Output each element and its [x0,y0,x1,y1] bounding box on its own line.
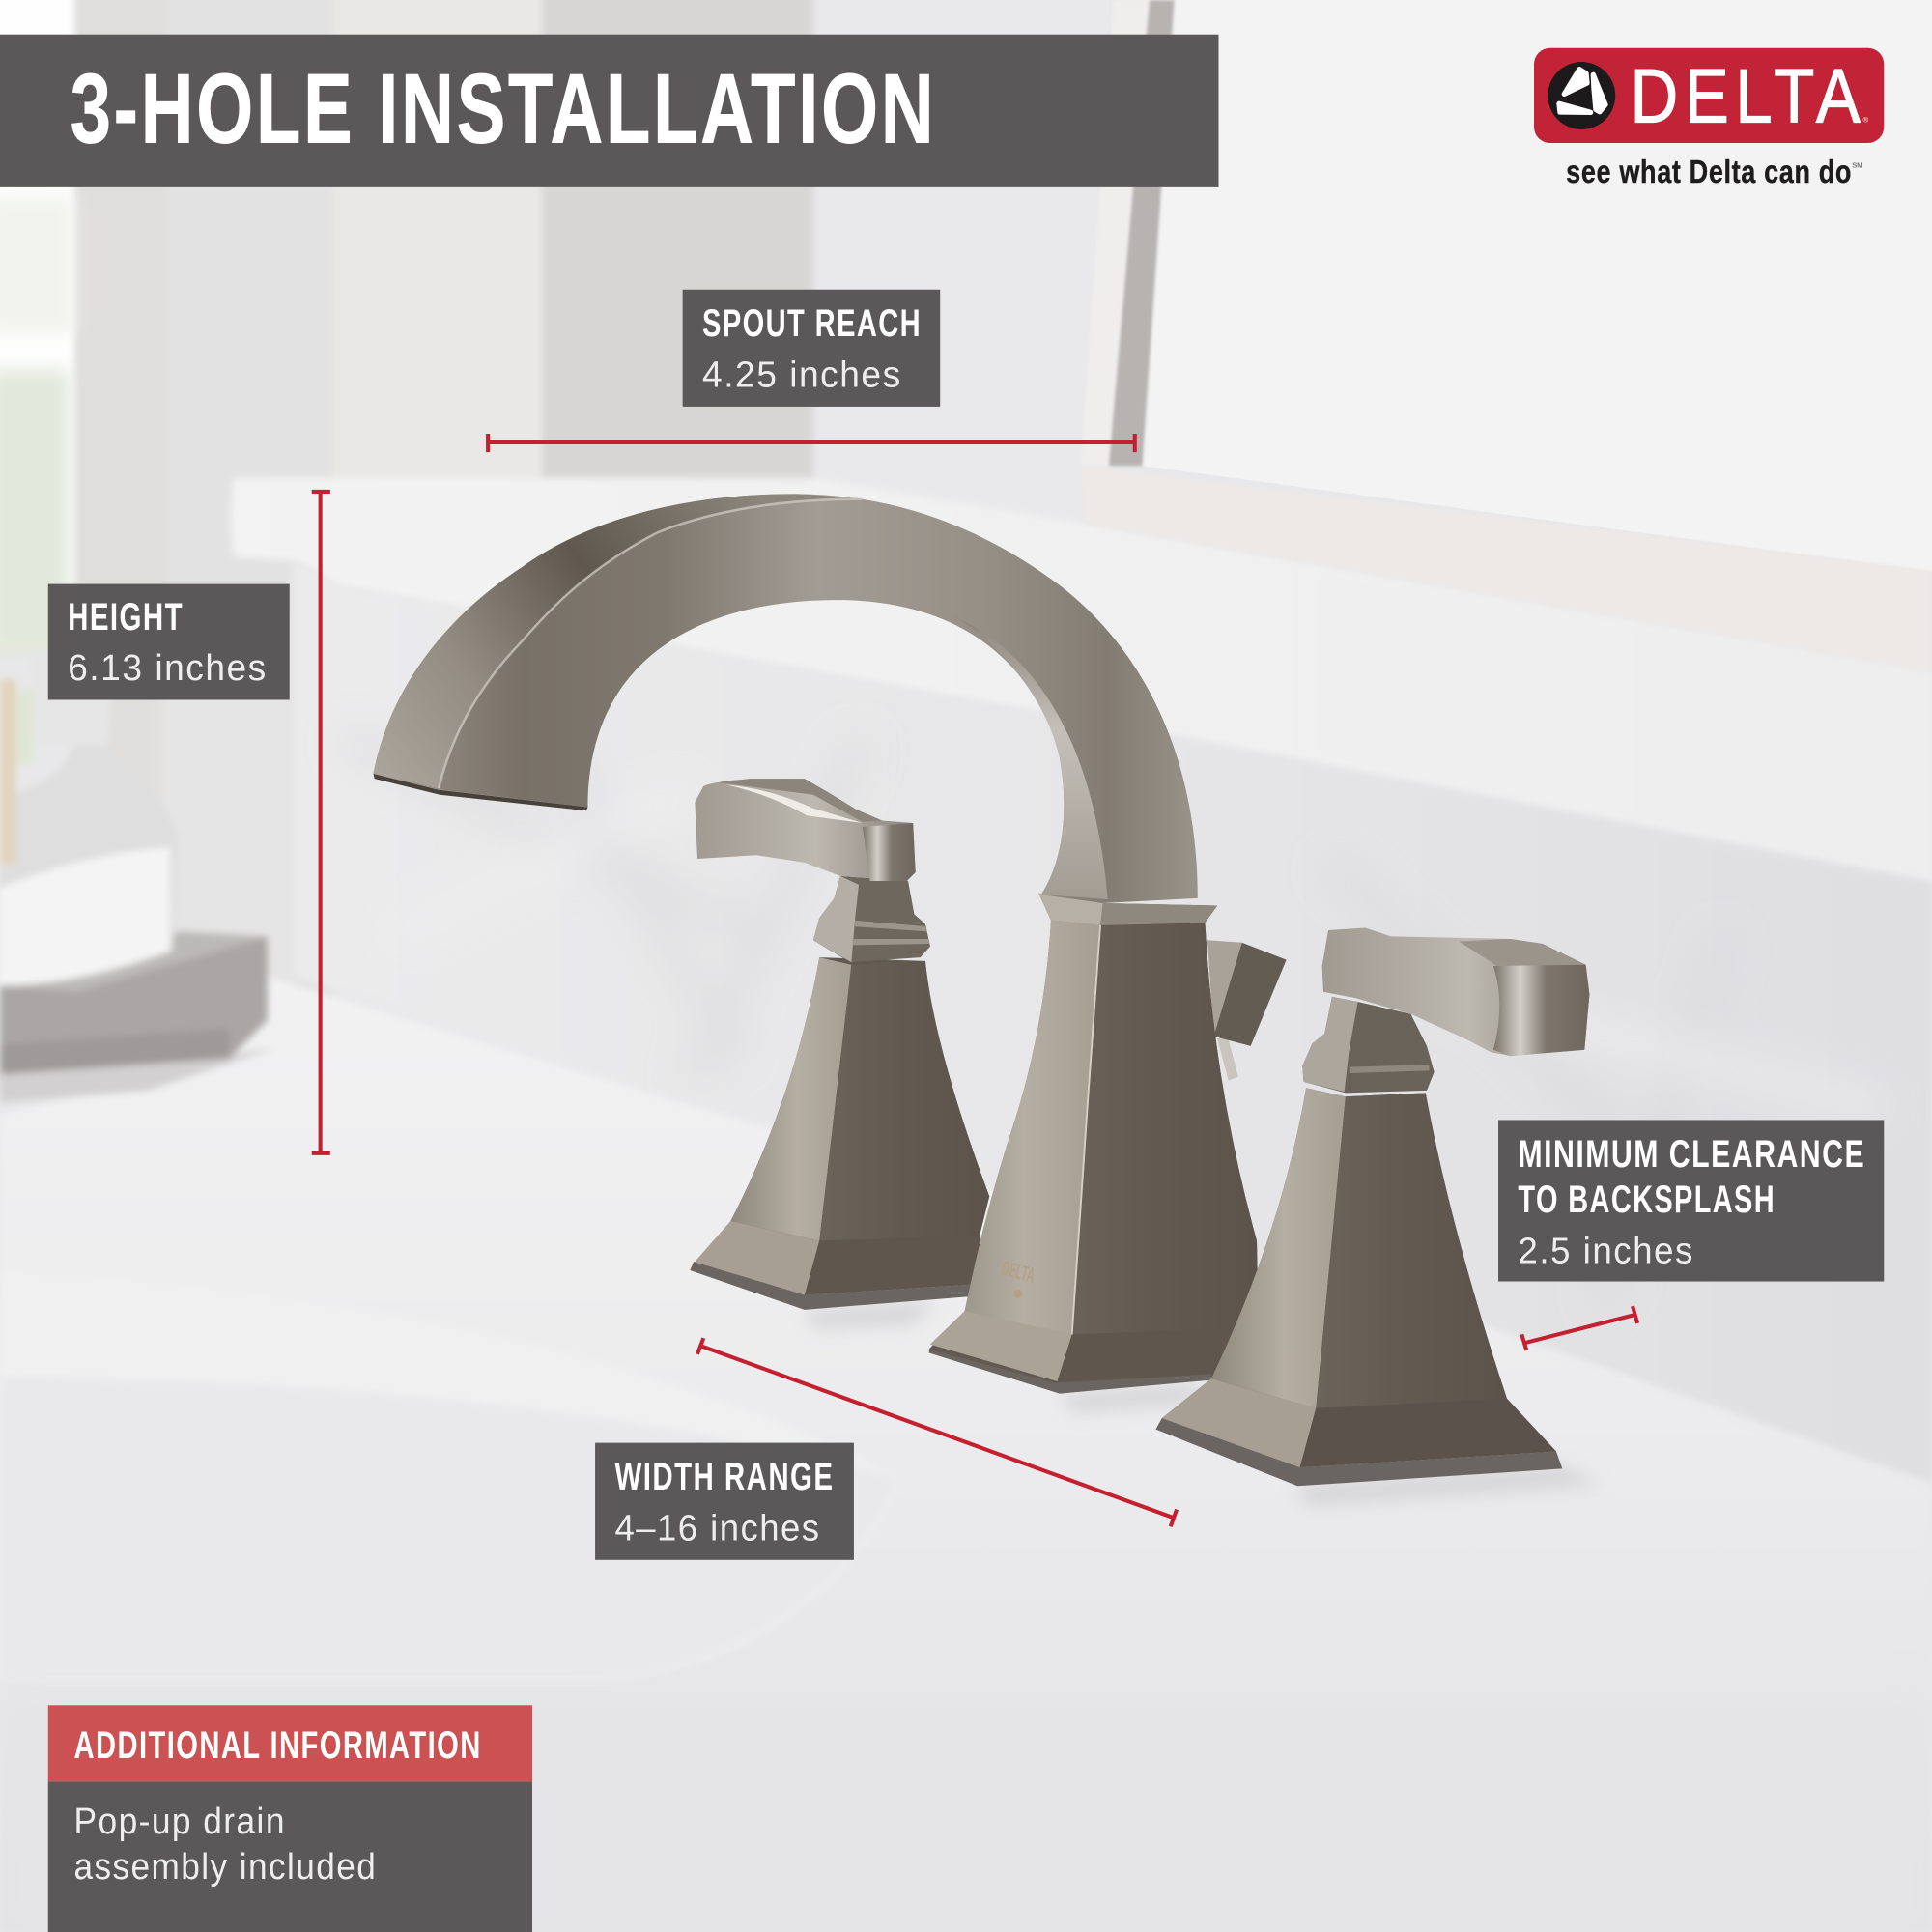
arrow: spout reach dimension [488,434,1135,452]
neck [813,876,930,962]
spout arch [373,494,1198,903]
neck [1302,997,1435,1093]
callout: spout reach: SPOUT REACH [702,302,922,345]
callout: minimum clearance to backsplash [1498,1120,1884,1282]
callout: minimum clearance to backsplash: TO BACKSPLASH [1518,1179,1776,1221]
title banner [0,35,1218,187]
panel: additional information: Pop-up drain [74,1801,286,1841]
callout: spout reach [683,290,940,407]
callout: width range: 4–16 inches [614,1507,820,1548]
callout: width range [595,1443,854,1560]
Delta logo: see what Delta can do [1566,155,1852,190]
Delta logo: ® [1863,115,1869,124]
lever [695,779,916,881]
callout: minimum clearance to backsplash: 2.5 inches [1518,1230,1694,1270]
callout: spout reach: 4.25 inches [702,355,902,395]
panel: additional information: ADDITIONAL INFORMATION [74,1724,482,1767]
arrow: width range dimension [697,1338,1177,1526]
lift rod [1208,940,1287,1081]
logo mark: triangle blades in black circle [1548,62,1615,129]
engraved mark [999,1256,1037,1298]
soft tray, jar and salt at left [0,653,277,1103]
basin bowl [0,1378,899,1681]
callout: height [48,584,290,699]
spout body [929,894,1260,1394]
Delta logo: SM [1852,160,1863,169]
Delta logo: DELTA [1631,53,1866,139]
mirror [1142,0,1932,572]
lever [1322,927,1589,1056]
Delta logo [1534,48,1884,190]
left handle [690,779,989,1310]
arrow: height dimension [312,492,330,1153]
base shadows [805,1301,1602,1506]
title banner: 3-HOLE INSTALLATION [71,53,936,163]
callout: width range: WIDTH RANGE [614,1456,835,1498]
backsplash marble front [294,560,1932,1485]
mirror frame [1081,466,1932,671]
engraved mark: DELTA [999,1256,1037,1288]
arrow: clearance dimension [1521,1306,1637,1350]
callout: height: 6.13 inches [68,647,268,688]
panel: additional information [48,1705,532,1932]
counter top [0,977,1932,1932]
panel: additional information: assembly included [74,1846,377,1887]
faucet [373,494,1589,1486]
callout: height: HEIGHT [68,596,184,639]
backsplash ledge top [231,478,1932,882]
right handle [1155,927,1589,1486]
